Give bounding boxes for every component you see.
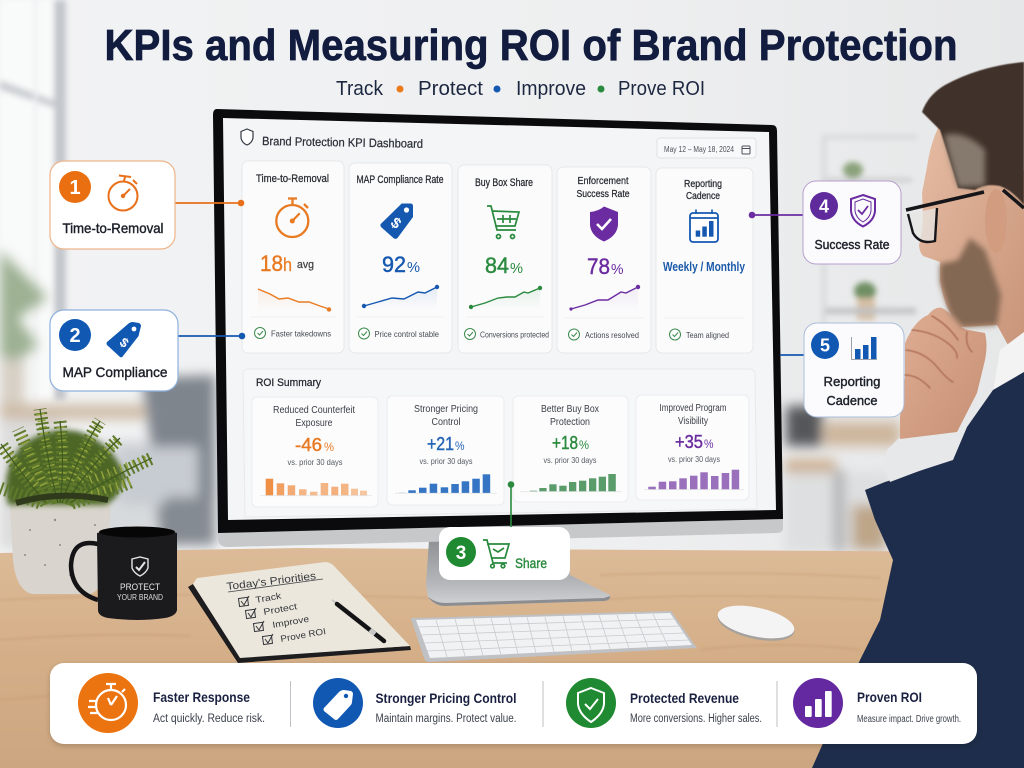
ear [985, 189, 1007, 253]
glasses [906, 190, 1024, 242]
benefit: protected revenue: More conversions. Higher sales. [630, 713, 762, 725]
notebook: Improve [272, 614, 310, 630]
callout 4: success rate: 4 [819, 196, 829, 216]
status: Team aligned [686, 330, 729, 340]
value [382, 252, 420, 277]
bar chart [520, 474, 622, 492]
sparkline [569, 285, 640, 312]
icon: shield check [590, 206, 618, 242]
panel: KPI card reporting cadence: Cadence [686, 190, 720, 202]
value: 18 [260, 251, 283, 276]
panel: KPI card time-to-removal [242, 161, 344, 353]
panel: KPI card reporting cadence [656, 168, 753, 353]
status: Price control stable [374, 329, 439, 339]
date picker [657, 138, 756, 158]
date picker: May 12 – May 18, 2024 [664, 145, 734, 154]
panel: KPI card buy box share: Buy Box Share [475, 177, 533, 189]
panel: KPI card enforcement success [557, 167, 651, 353]
ROI card: program visibility [636, 395, 749, 500]
callout 4: success rate [749, 181, 901, 264]
icon: calendar chart [690, 210, 718, 242]
benefit: faster response: Faster Response [153, 689, 250, 705]
ROI card: buy box protection: Protection [550, 417, 590, 428]
callout 2: MAP compliance [50, 310, 245, 391]
subtitle: Track [336, 78, 384, 100]
monitor stand [426, 540, 610, 606]
neck and head [919, 115, 1024, 345]
benefit: stronger pricing control [313, 678, 516, 728]
person [812, 62, 1024, 768]
value: % [611, 261, 624, 278]
keyboard [411, 611, 697, 662]
notebook: Protect [263, 601, 298, 617]
ROI card: pricing control: Stronger Pricing [414, 404, 478, 415]
value: 78 [587, 254, 610, 279]
panel: ROI summary [243, 369, 757, 517]
callout 3: share [439, 481, 570, 580]
benefit: faster response: Act quickly. Reduce risk. [153, 713, 265, 725]
panel: KPI card MAP compliance [349, 163, 452, 353]
bar chart [644, 470, 744, 490]
status: Faster takedowns [271, 328, 331, 338]
status [464, 328, 549, 340]
ROI card: counterfeit exposure: % [324, 440, 334, 454]
panel: KPI card buy box share [458, 165, 552, 353]
ROI card: counterfeit exposure [252, 397, 378, 507]
ROI card: program visibility: Visibility [678, 416, 708, 427]
icon: cart [483, 540, 509, 568]
status: Conversions protected [480, 330, 549, 340]
notebook: Prove ROI [280, 626, 327, 644]
potted plant [0, 409, 152, 594]
beard [940, 238, 1001, 327]
icon: price tag [380, 204, 413, 239]
ROI card: pricing control: +21 [427, 434, 454, 454]
foliage [0, 409, 152, 505]
ROI card: counterfeit exposure: Reduced Counterfeit [273, 405, 355, 416]
panel: ROI summary: ROI Summary [256, 377, 321, 389]
ROI card: counterfeit exposure: vs. prior 30 days [288, 458, 342, 467]
icon: stopwatch [276, 198, 308, 237]
suit [812, 372, 1024, 768]
callout 1: time-to-removal: 1 [69, 177, 81, 199]
panel: KPI card enforcement success: Enforcement [578, 175, 629, 187]
ROI card: pricing control [387, 396, 504, 505]
benefit: stronger pricing control: Stronger Pricing Control [376, 690, 516, 706]
ROI card: program visibility: % [704, 437, 714, 451]
callout 1: time-to-removal [50, 161, 244, 249]
ROI card: pricing control: vs. prior 30 days [420, 457, 472, 466]
icon: bars [852, 337, 877, 360]
benefit: protected revenue [566, 678, 762, 728]
value [260, 251, 314, 276]
panel: KPI card time-to-removal: Time-to-Removal [256, 173, 329, 185]
ROI card: buy box protection: Better Buy Box [541, 404, 599, 415]
ROI card: counterfeit exposure: -46 [295, 435, 322, 455]
sparkline [362, 285, 439, 310]
mug [71, 526, 177, 620]
ROI card: buy box protection: % [579, 438, 589, 452]
hand and wrist [900, 308, 986, 439]
callout 5: reporting cadence: Reporting [824, 374, 880, 389]
bar chart [395, 474, 497, 493]
notebook: Today's Priorities [226, 570, 317, 593]
benefit: protected revenue: Protected Revenue [630, 690, 739, 706]
value [587, 254, 624, 279]
dashboard header [241, 129, 423, 151]
callout 4: success rate: Success Rate [814, 238, 890, 252]
ROI card: counterfeit exposure: Exposure [296, 418, 333, 429]
icon: tag: $ [117, 334, 132, 351]
dashboard title: Brand Protection KPI Dashboard [262, 134, 423, 151]
subtitle: Prove ROI [618, 78, 705, 100]
subtitle [336, 78, 705, 100]
benefit: stronger pricing control: Maintain margins. Protect value. [376, 713, 516, 725]
ROI card: pricing control: Control [432, 417, 460, 428]
value: % [407, 259, 420, 276]
value: h [283, 255, 292, 275]
icon: shield [241, 129, 253, 145]
value: 84 [485, 253, 509, 278]
callout 2: MAP compliance: MAP Compliance [62, 364, 168, 380]
ROI card: program visibility: vs. prior 30 days [668, 455, 720, 464]
fingers [905, 316, 972, 388]
ROI card: program visibility: +35 [675, 432, 703, 452]
bar chart [260, 479, 372, 496]
panel: KPI card enforcement success: Success Rate [576, 188, 630, 200]
value [485, 253, 523, 278]
icon: cart [487, 206, 519, 238]
status: Actions resolved [585, 330, 639, 340]
status [358, 328, 439, 339]
callout 3: share: Share [515, 555, 547, 571]
ROI card: pricing control: % [455, 439, 465, 453]
benefit: proven ROI: Proven ROI [857, 689, 922, 705]
panel: benefits bar [50, 663, 977, 744]
mug: YOUR BRAND [117, 592, 163, 602]
value: avg [297, 259, 314, 271]
mug: PROTECT [120, 582, 160, 593]
callout 5: reporting cadence: 5 [820, 336, 830, 356]
greying temple [944, 134, 985, 187]
shirt cuff [885, 430, 958, 482]
panel: KPI card reporting cadence: Reporting [684, 178, 722, 190]
ROI card: buy box protection: +18 [552, 433, 578, 453]
notebook: Track [255, 591, 283, 605]
benefit: proven ROI [793, 678, 961, 728]
sparkline [258, 289, 331, 312]
ROI card: buy box protection: vs. prior 30 days [544, 456, 596, 465]
panel: KPI card MAP compliance: MAP Compliance Rate [356, 174, 444, 186]
pen [332, 600, 384, 641]
ROI card: program visibility: Improved Program [660, 403, 726, 414]
desk [0, 548, 1024, 768]
value: 92 [382, 252, 406, 277]
collar [993, 332, 1024, 392]
value: % [510, 260, 523, 277]
icon: stopwatch [108, 176, 138, 210]
subtitle: Protect [418, 78, 483, 100]
subtitle: Improve [516, 78, 586, 100]
callout 5: reporting cadence [780, 323, 904, 417]
status [254, 328, 331, 338]
status [568, 329, 639, 340]
sparkline [469, 286, 542, 310]
benefit: proven ROI: Measure impact. Drive growth. [857, 714, 961, 725]
icon: tag [106, 322, 141, 357]
callout 1: time-to-removal: Time-to-Removal [62, 220, 164, 236]
monitor [213, 109, 783, 547]
title: KPIs and Measuring ROI of Brand Protection [104, 21, 958, 70]
notebook [188, 562, 411, 663]
mouse [715, 600, 797, 647]
hair [922, 62, 1024, 205]
value: Weekly / Monthly [663, 260, 745, 274]
icon: shield [851, 195, 875, 226]
callout 2: MAP compliance: 2 [69, 325, 81, 347]
icon: price tag: $ [387, 214, 405, 233]
callout 3: share: 3 [456, 543, 466, 564]
status [670, 329, 729, 340]
ROI card: buy box protection [513, 396, 628, 502]
benefit: faster response [78, 673, 265, 733]
callout 5: reporting cadence: Cadence [826, 393, 878, 408]
